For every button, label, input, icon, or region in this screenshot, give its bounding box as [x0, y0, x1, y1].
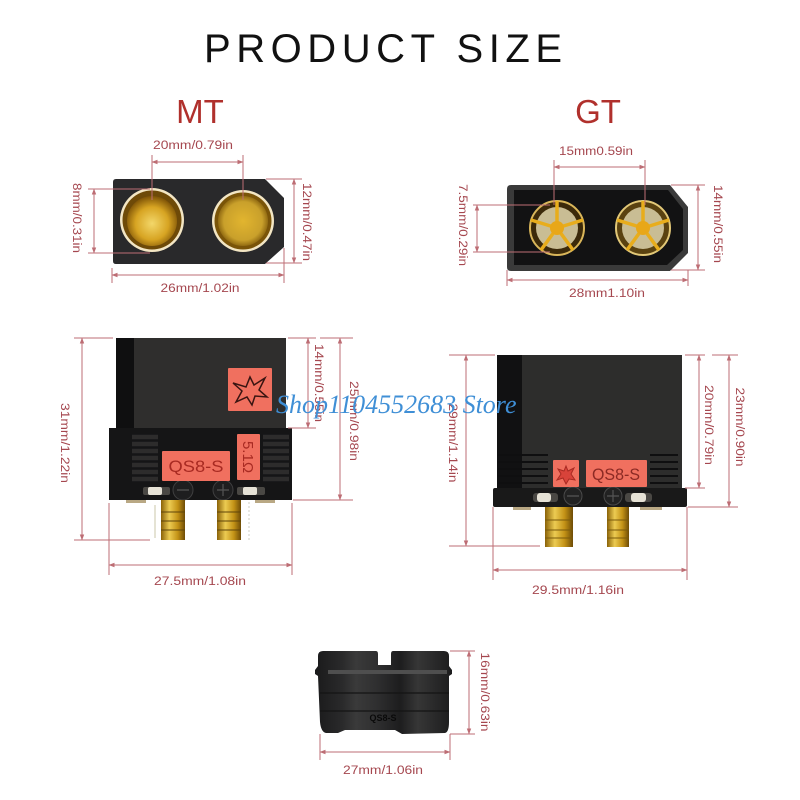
right gold socket [212, 190, 274, 252]
connector face: GT [507, 185, 688, 271]
dimension: 15mm: 15mm0.59in [559, 146, 633, 158]
label: 5.1 ohm: 5.1Ω [239, 441, 256, 473]
dimension: 27.5mm [109, 503, 292, 588]
right gold star contact [616, 201, 670, 255]
dimension: 14mm: 14mm/0.55in [312, 344, 324, 422]
dimension: 25mm [293, 338, 359, 500]
ribbed side grips [498, 455, 678, 483]
cap marking: QS8-S [369, 713, 397, 723]
dimension: 20mm: 20mm/0.79in [702, 385, 714, 465]
dimension: 12mm [266, 179, 312, 263]
gold pins [126, 500, 275, 540]
dimension: 15mm [554, 146, 645, 205]
dimension: 28mm [507, 270, 688, 300]
dimension: 12mm: 12mm/0.47in [300, 183, 312, 261]
dimension: 7.5mm [456, 184, 550, 266]
dimension: 29.5mm [493, 507, 687, 597]
connector face: MT [113, 179, 284, 264]
dimension: 27mm: 27mm/1.06in [343, 765, 423, 777]
label: 5.1 ohm [237, 434, 260, 480]
panel: GT side view [446, 355, 745, 597]
dimension: 14mm [671, 185, 723, 270]
panel: MT front face [70, 140, 312, 295]
watermark: Shop1104552683 Store [276, 390, 516, 419]
dimension: 31mm [58, 338, 150, 540]
dimension: 7.5mm: 7.5mm/0.29in [456, 184, 468, 266]
connector upper body [497, 355, 682, 488]
dimension: 14mm: 14mm/0.55in [711, 185, 723, 263]
dimension: 29.5mm: 29.5mm/1.16in [532, 585, 624, 597]
dimension: 8mm [70, 183, 150, 253]
icon: spark warning label [553, 460, 579, 487]
dimension: 20mm [685, 355, 714, 488]
dimension: 16mm: 16mm/0.63in [478, 652, 490, 732]
title: PRODUCT SIZE [204, 27, 562, 71]
heading: GT: GT [575, 93, 621, 130]
panel: end cap [315, 651, 490, 777]
heading: MT: MT [176, 93, 224, 130]
dimension: 23mm: 23mm/0.90in [733, 388, 745, 466]
panel: GT front face [456, 146, 723, 300]
label: QS8-S: QS8-S [168, 457, 224, 476]
connector collar [109, 428, 292, 500]
dimension: 27mm [320, 734, 450, 777]
dimension: 28mm: 28mm1.10in [569, 288, 645, 300]
connector base flange [493, 487, 687, 507]
dimension: 27.5mm: 27.5mm/1.08in [154, 576, 246, 588]
dimension: 26mm: 26mm/1.02in [160, 283, 240, 295]
dimension: 23mm [688, 355, 745, 507]
connector upper body [116, 338, 286, 428]
dimension: 29mm [446, 355, 540, 546]
label: QS8-S: QS8-S [592, 466, 640, 484]
dimension: 26mm [112, 248, 284, 295]
label: QS8-S [586, 460, 647, 487]
dimension: 25mm: 25mm/0.98in [347, 381, 359, 461]
gold pins [513, 507, 662, 547]
dimension: 14mm [288, 338, 324, 428]
dimension: 16mm [450, 651, 490, 734]
icon: spark warning label [228, 368, 272, 411]
dimension: 8mm: 8mm/0.31in [70, 183, 82, 253]
left gold star contact [530, 201, 584, 255]
dimension: 29mm: 29mm/1.14in [446, 404, 458, 482]
cap band and ribs [320, 670, 449, 711]
left gold socket [120, 188, 184, 252]
dimension: 31mm: 31mm/1.22in [58, 403, 70, 483]
face recess [514, 190, 683, 265]
panel: MT side view [58, 338, 359, 588]
dimension: 20mm: 20mm/0.79in [153, 140, 233, 152]
cap body [315, 651, 452, 734]
dimension: 20mm [152, 140, 243, 200]
label: QS8-S [162, 451, 230, 481]
